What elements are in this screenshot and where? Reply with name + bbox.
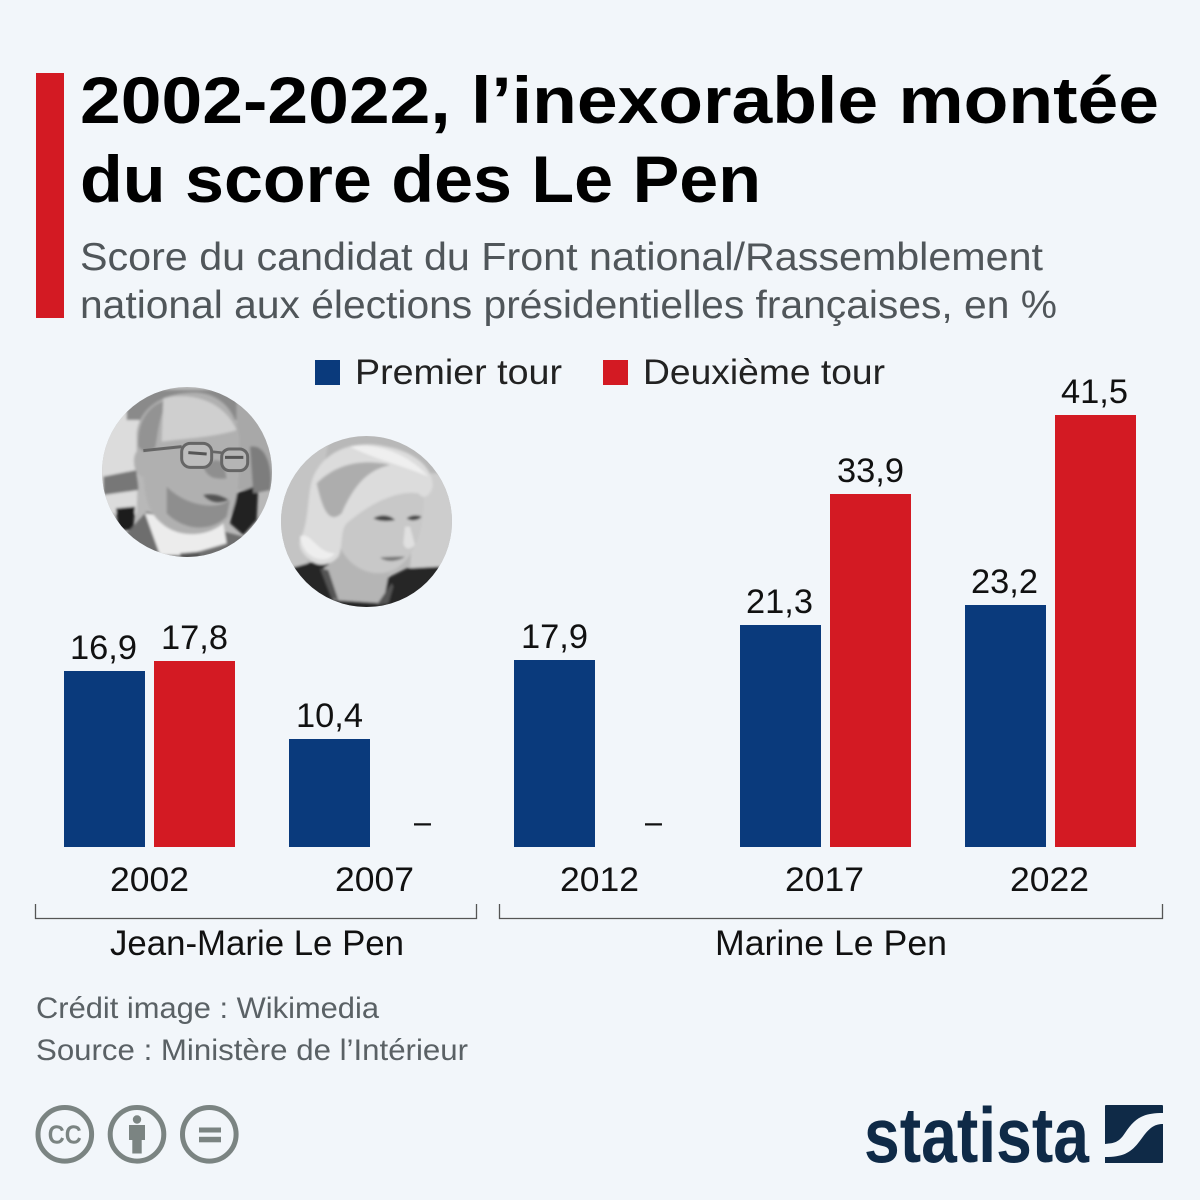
title (80, 63, 1159, 216)
bars: 2012 (514, 618, 662, 899)
bars: 2022: 2022 (1010, 861, 1089, 899)
accent bar (36, 73, 64, 318)
source and credit: Source : Ministère de l’Intérieur (36, 1034, 468, 1067)
bars: 2002 (64, 619, 235, 899)
bars: 2022: 41,5 (1061, 373, 1128, 411)
subtitle: Score du candidat du Front national/Rassemblement (80, 236, 1043, 279)
bars: 2012: 17,9 (521, 618, 588, 656)
bars: 2007: 2007 (335, 861, 414, 899)
bar chart (64, 373, 1136, 899)
bracket: Marine Le Pen: Marine Le Pen (715, 924, 947, 963)
title: 2002-2022, l’inexorable montée (80, 63, 1159, 137)
bars: 2022 (965, 373, 1136, 899)
statista logo: statista (864, 1091, 1090, 1179)
bars: 2017 (740, 452, 911, 899)
bars: 2012: – (645, 803, 662, 841)
icon: no derivatives (182, 1108, 236, 1161)
title: du score des Le Pen (80, 142, 761, 216)
source and credit: Crédit image : Wikimedia (36, 992, 379, 1025)
bars: 2002: 16,9 (70, 629, 137, 667)
bars: 2007 (289, 697, 431, 899)
bars: 2017: 2017 (785, 861, 864, 899)
bars: 2002: 2002 (110, 861, 189, 899)
bars: 2002: 17,8 (161, 619, 228, 657)
icon: creative commons: CC (48, 1120, 82, 1150)
legend: Premier tour (355, 353, 562, 392)
subtitle (80, 236, 1057, 327)
bracket: Jean-Marie Le Pen: Jean-Marie Le Pen (110, 924, 404, 963)
bars: 2022: 23,2 (971, 563, 1038, 601)
bars: 2007: – (414, 803, 431, 841)
legend: Deuxième tour (643, 353, 885, 392)
source and credit (36, 992, 468, 1067)
icon: attribution (110, 1108, 164, 1161)
portrait: Marine Le Pen (278, 433, 455, 610)
subtitle: national aux élections présidentielles françaises, en % (80, 284, 1057, 327)
icon: creative commons (38, 1108, 92, 1161)
legend (315, 353, 885, 392)
bars: 2012: 2012 (560, 861, 639, 899)
bracket: Jean-Marie Le Pen (36, 904, 476, 963)
bars: 2007: 10,4 (296, 697, 363, 735)
bars: 2017: 33,9 (837, 452, 904, 490)
portrait: Jean-Marie Le Pen (100, 385, 277, 560)
bars: 2017: 21,3 (746, 583, 813, 621)
bracket: Marine Le Pen (500, 904, 1162, 963)
